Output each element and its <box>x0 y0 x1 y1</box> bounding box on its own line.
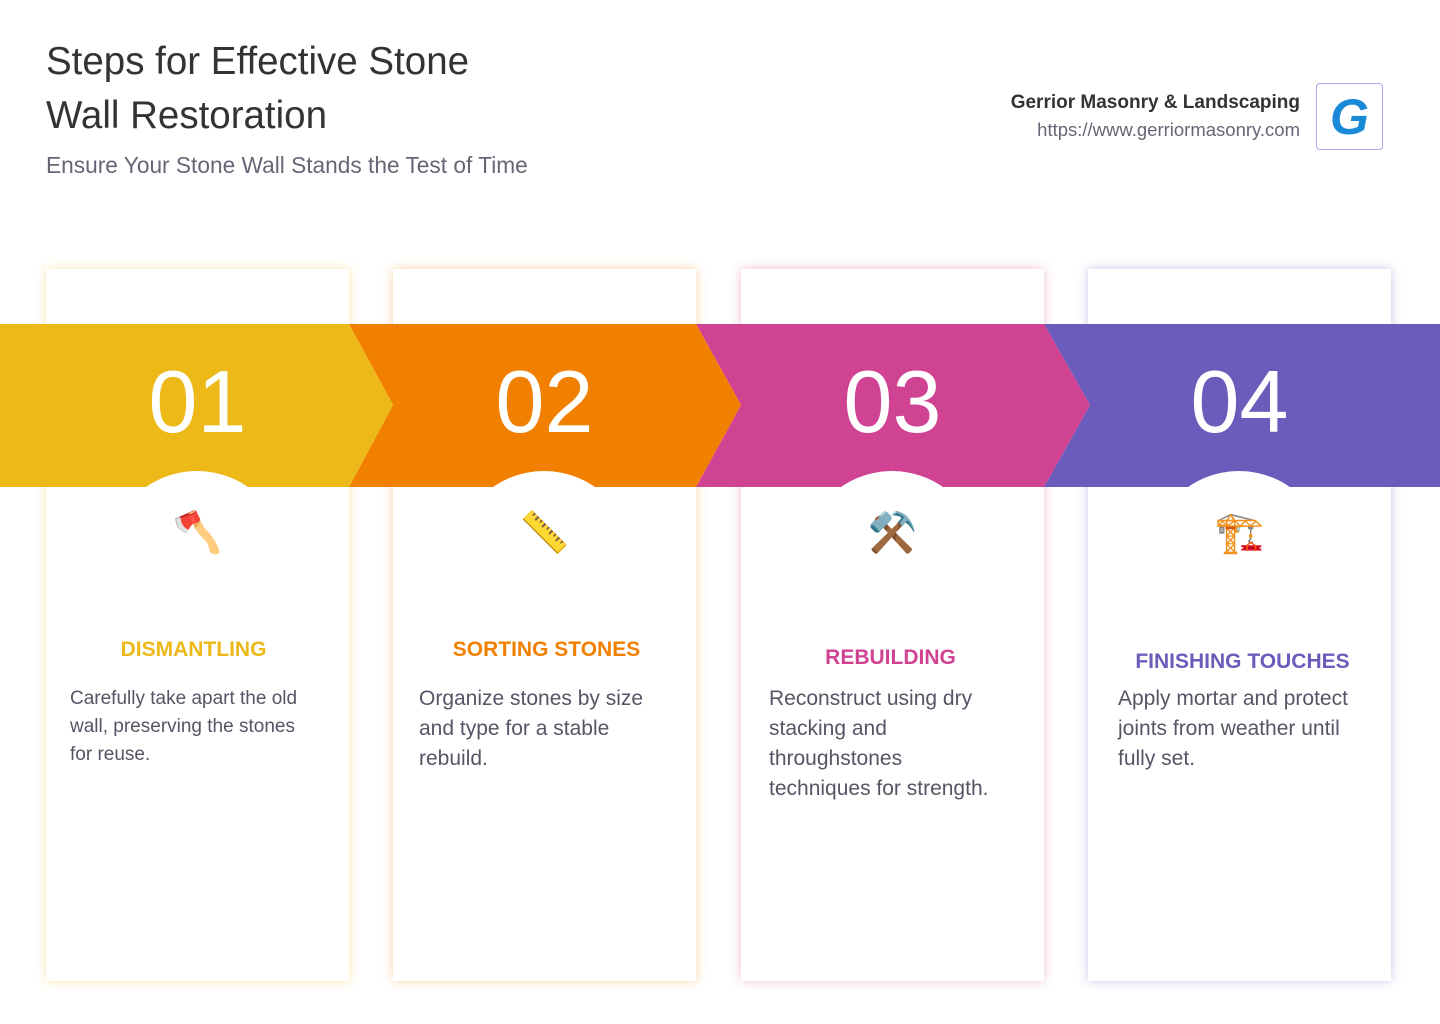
chevron banner <box>0 324 1440 487</box>
text: Reconstruct using dry stacking and throughstones techniques for strength. <box>769 687 988 800</box>
subtitle: Ensure Your Stone Wall Stands the Test of Time <box>46 152 528 178</box>
brand <box>1011 92 1300 140</box>
title: Wall Restoration <box>46 94 327 137</box>
title: Steps for Effective Stone <box>46 40 469 83</box>
icon: crane: 🏗️ <box>1215 511 1264 555</box>
text: Apply mortar and protect joints from weather until fully set. <box>1118 687 1348 770</box>
step 1: DISMANTLING <box>121 638 266 661</box>
icon: ruler: 📏 <box>520 511 569 555</box>
brand: https://www.gerriormasonry.com <box>1037 119 1300 140</box>
logo: G <box>1330 89 1369 145</box>
circles <box>108 471 286 649</box>
step 3: REBUILDING <box>825 646 956 669</box>
brand: Gerrior Masonry & Landscaping <box>1011 92 1300 113</box>
text: 03 <box>844 352 941 451</box>
logo <box>1316 83 1383 150</box>
cards <box>46 269 349 981</box>
step 2: SORTING STONES <box>453 638 640 661</box>
step 4: FINISHING TOUCHES <box>1135 650 1350 673</box>
text: Carefully take apart the old wall, preserving the stones for reuse. <box>70 688 297 765</box>
text: Organize stones by size and type for a stable rebuild. <box>419 687 643 770</box>
icon: tools: ⚒️ <box>868 511 917 555</box>
icon: axe: 🪓 <box>173 511 222 555</box>
numbers: 01 <box>149 352 246 451</box>
text: 02 <box>496 352 593 451</box>
text: 04 <box>1191 352 1288 451</box>
title <box>46 40 469 137</box>
